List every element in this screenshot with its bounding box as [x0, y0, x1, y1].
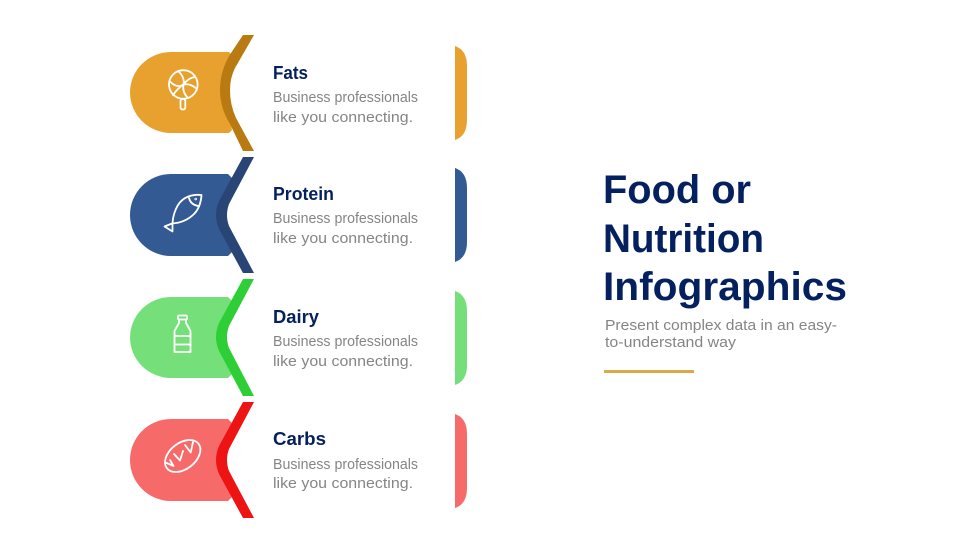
fats tab	[130, 52, 232, 133]
panel: carbs	[130, 402, 467, 518]
title	[603, 168, 847, 309]
panel: fats	[130, 35, 467, 151]
dairy tab	[130, 297, 232, 378]
subtitle: to-understand way	[605, 334, 737, 351]
fats side bar	[455, 46, 467, 140]
fats chevron	[220, 35, 254, 151]
title: Infographics	[603, 265, 847, 309]
panel: protein	[130, 157, 467, 273]
dairy chevron	[216, 279, 254, 396]
subtitle	[605, 317, 837, 351]
dairy icon: bottle	[174, 316, 190, 352]
subtitle: Present complex data in an easy-	[605, 317, 837, 334]
dairy side bar	[455, 291, 467, 385]
carbs text	[273, 457, 418, 492]
accent line	[604, 370, 694, 373]
protein chevron	[216, 157, 254, 273]
fats text: like you connecting.	[273, 110, 413, 126]
dairy text: Business professionals	[273, 334, 418, 350]
title: Food or	[603, 168, 751, 212]
protein text	[273, 211, 418, 247]
fats text	[273, 90, 418, 126]
fats heading: Fats	[273, 63, 308, 83]
protein tab	[130, 174, 232, 256]
carbs chevron	[216, 402, 254, 518]
carbs tab	[130, 419, 232, 501]
carbs icon: bread	[159, 433, 206, 479]
dairy text: like you connecting.	[273, 354, 413, 370]
carbs text: Business professionals	[273, 457, 418, 473]
carbs text: like you connecting.	[273, 476, 413, 492]
dairy heading: Dairy	[273, 307, 319, 327]
carbs heading: Carbs	[273, 429, 326, 449]
fats text: Business professionals	[273, 90, 418, 106]
panel: dairy	[130, 279, 467, 396]
protein icon: fish	[164, 195, 202, 232]
carbs side bar	[455, 414, 467, 508]
protein side bar	[455, 168, 467, 262]
protein text: Business professionals	[273, 211, 418, 227]
protein heading: Protein	[273, 184, 334, 204]
dairy text	[273, 334, 418, 370]
fats icon: lollipop	[169, 70, 198, 110]
title: Nutrition	[603, 217, 764, 261]
protein text: like you connecting.	[273, 231, 413, 247]
